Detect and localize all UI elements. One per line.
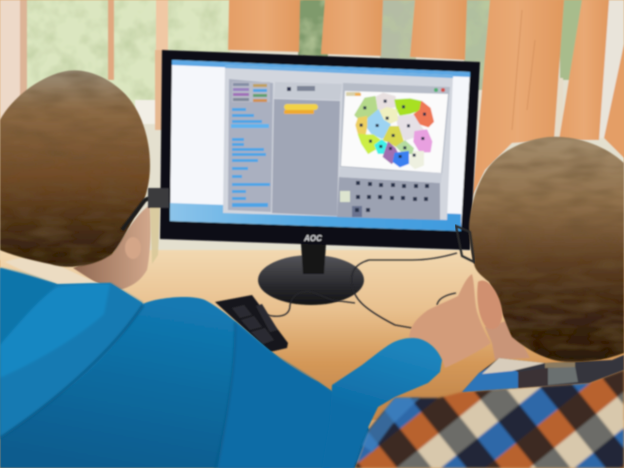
left boy sleeve <box>322 338 442 468</box>
glasses <box>122 188 169 264</box>
block palette <box>228 79 273 212</box>
ear <box>477 281 502 329</box>
map of Poland regions <box>355 93 433 168</box>
hoodie body <box>0 268 370 468</box>
monitor stand <box>258 244 364 305</box>
stage with map <box>340 83 450 175</box>
screen <box>170 60 470 231</box>
taskbar <box>170 203 461 231</box>
desk <box>0 250 624 420</box>
neck <box>485 320 530 360</box>
hair <box>0 70 150 267</box>
sprite panel <box>337 168 442 220</box>
ear <box>125 237 141 259</box>
hair <box>469 137 624 362</box>
shirt blue shoulder <box>362 398 420 452</box>
neck and face <box>73 205 151 291</box>
left boy <box>0 70 370 468</box>
shirt collar <box>462 355 624 392</box>
hood detail <box>0 268 345 468</box>
right boy <box>355 137 624 468</box>
monitor <box>160 50 480 305</box>
vertical blinds <box>228 0 624 197</box>
window frame left <box>0 0 168 130</box>
hoodie collar lining <box>5 257 100 285</box>
plaid shirt <box>355 370 624 468</box>
program window <box>223 65 453 220</box>
brand label: AOC <box>303 234 322 243</box>
background: window and blinds <box>0 0 624 260</box>
cables on desk <box>267 253 457 328</box>
glasses <box>456 226 474 262</box>
keyboard <box>215 295 288 352</box>
foliage through the window <box>24 0 586 138</box>
hand on desk <box>409 274 491 368</box>
white curtain edge <box>596 0 624 138</box>
script area <box>272 82 342 216</box>
monitor bezel <box>160 50 480 250</box>
